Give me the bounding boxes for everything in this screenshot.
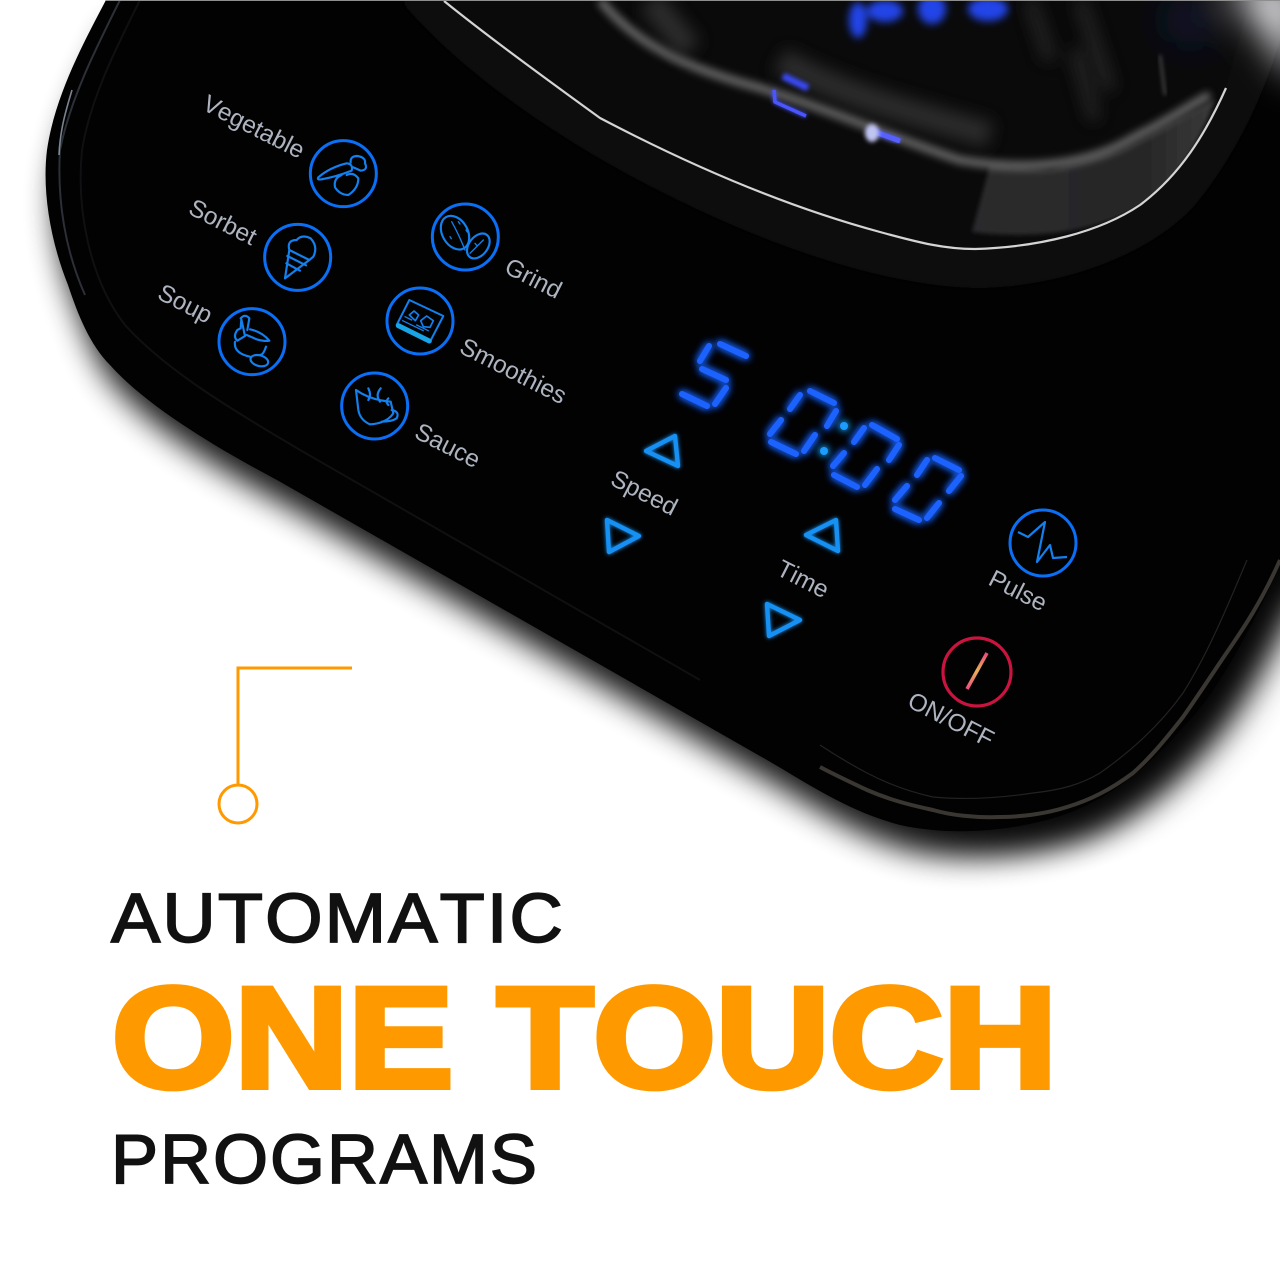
title line: automatic: AUTOMATIC <box>111 879 565 957</box>
labels: programs: Grind <box>500 253 566 305</box>
labels: programs: Sorbet <box>184 194 261 251</box>
button: on/off <box>943 638 1011 706</box>
title <box>111 879 1057 1198</box>
labels: programs: Soup <box>153 279 217 329</box>
outer rim bands <box>820 560 1280 817</box>
labels: controls: Time <box>772 555 833 604</box>
title line: one touch: ONE TOUCH <box>112 959 1057 1118</box>
drop shadow under blender base <box>56 26 1280 857</box>
blurred blue reflections <box>849 0 1008 38</box>
button: vegetable <box>310 141 376 207</box>
button: sauce <box>342 373 408 439</box>
button: grind <box>432 204 498 270</box>
labels: programs: Smoothies <box>455 333 571 410</box>
title line: programs: PROGRAMS <box>111 1120 539 1198</box>
labels: controls: Pulse <box>984 565 1051 617</box>
jar collar <box>400 0 1280 288</box>
seven segment display 5 0:00 <box>682 344 961 520</box>
corner haze over jar <box>1164 0 1280 85</box>
labels: controls <box>606 465 1051 753</box>
labels: programs: Sauce <box>410 418 484 474</box>
labels: programs <box>153 90 571 474</box>
labels: programs: Vegetable <box>198 90 309 164</box>
callout connector <box>219 668 352 823</box>
program buttons <box>219 141 498 439</box>
labels: controls: Speed <box>606 465 682 522</box>
button: smoothies <box>387 288 453 354</box>
blender base photo <box>46 0 1280 832</box>
button: pulse <box>1010 510 1076 576</box>
jar rim highlight <box>444 1 1226 249</box>
glass reflections <box>972 100 1215 235</box>
button: soup <box>219 309 285 375</box>
speed and time arrows <box>607 436 838 636</box>
labels: controls: ON/OFF <box>903 687 998 753</box>
glass jar <box>594 1 1216 236</box>
top edge line <box>106 0 1280 1</box>
button: sorbet <box>265 224 331 290</box>
